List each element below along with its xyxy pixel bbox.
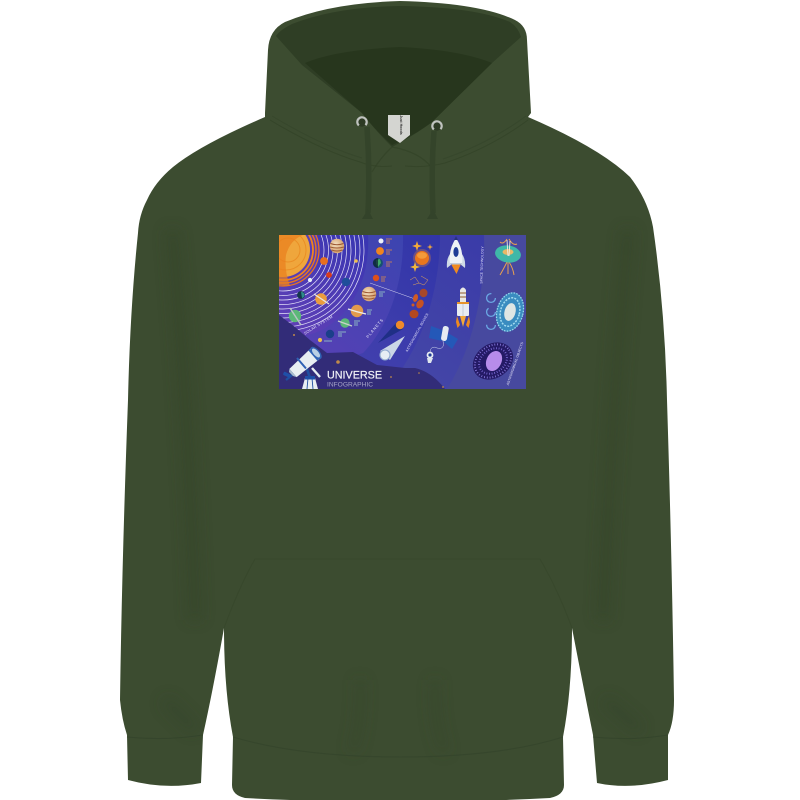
meteor <box>378 321 404 343</box>
black hole <box>494 239 522 275</box>
satellite <box>429 326 458 352</box>
right eyelet <box>430 119 444 133</box>
star and sparkles <box>410 241 433 272</box>
divider line <box>370 283 415 299</box>
pocket <box>224 559 572 628</box>
neck label: Just Hoods <box>399 115 403 135</box>
astronomical objects label: ASTRONOMICAL OBJECTS <box>506 341 525 386</box>
hood lining <box>276 6 521 147</box>
hood outer <box>265 1 531 166</box>
left eyelet <box>355 115 369 129</box>
solar system label: SOLAR SYSTEM <box>303 315 334 336</box>
subtitle: INFOGRAPHIC <box>327 382 373 388</box>
launch rocket <box>456 288 470 328</box>
band: planets <box>305 235 403 354</box>
purple galaxy <box>472 342 514 380</box>
astronomical bodies label: ASTRONOMICAL BODIES <box>405 312 430 353</box>
hoodie <box>120 1 674 800</box>
sun <box>279 235 320 287</box>
cuff seams <box>127 735 668 739</box>
solar system orbits <box>279 235 364 330</box>
band: solar system <box>279 235 368 336</box>
galaxy type arcs <box>487 294 495 329</box>
print: universe infographic <box>279 235 526 389</box>
comet <box>380 336 405 360</box>
collar crossover <box>372 147 432 172</box>
band: astronomical bodies <box>400 235 440 308</box>
right drawstring <box>427 131 438 219</box>
spiral galaxy <box>496 292 524 332</box>
collar seams <box>270 120 528 167</box>
asteroids <box>410 289 428 318</box>
band: space technology <box>420 235 484 366</box>
space technology label: SPACE TECHNOLOGY <box>479 246 485 284</box>
planet caption bars <box>381 239 392 281</box>
rocket <box>447 236 465 274</box>
planets column <box>318 238 384 342</box>
print background <box>447 235 526 389</box>
planets label: PLANETS <box>365 317 385 339</box>
hood inner depth <box>305 47 492 145</box>
cloth shading <box>165 230 640 752</box>
neck label <box>388 115 410 143</box>
hem ribbing seam <box>233 737 563 757</box>
title: UNIVERSE <box>327 370 382 382</box>
foreground stars <box>293 334 444 388</box>
telescope <box>283 345 324 389</box>
astronaut <box>427 352 433 363</box>
constellation <box>410 276 428 285</box>
dark foreground hills <box>279 315 445 389</box>
solar system planets <box>289 239 358 325</box>
left drawstring <box>362 127 373 219</box>
hoodie body and sleeves <box>120 117 674 800</box>
